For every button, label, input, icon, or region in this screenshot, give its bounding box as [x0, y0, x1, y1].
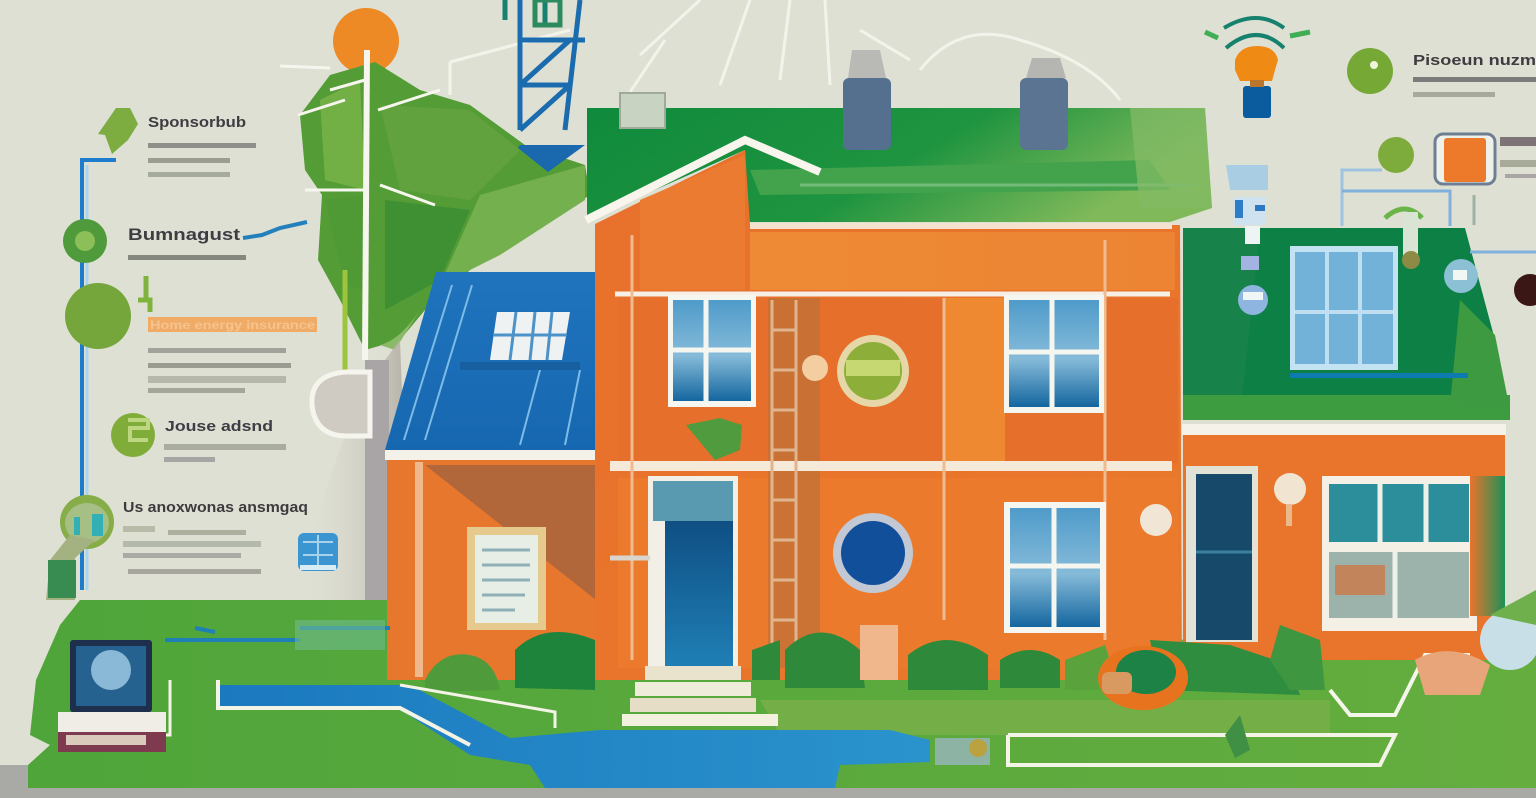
info block: item 5: [46, 495, 338, 600]
side door: [1186, 466, 1258, 642]
icon: sun: [333, 8, 399, 74]
steps: [622, 666, 778, 726]
window: upper right: [1004, 295, 1104, 413]
right connector frame: [1342, 170, 1536, 252]
main house wall: [586, 140, 1182, 680]
window: lower right: [1004, 502, 1106, 633]
large green tree: [280, 50, 590, 370]
sensor bulb: [1444, 259, 1478, 293]
large window: [1322, 476, 1505, 631]
icon: communication tower: [505, 0, 585, 172]
info block: item 2: Bumnagust: [128, 225, 240, 244]
info block: item 1: [98, 108, 256, 177]
right info block 2: [1378, 134, 1536, 184]
white gable trim: [586, 140, 820, 220]
info block: item 4: [111, 413, 286, 462]
info block: item 3: Home energy insurance: [150, 318, 315, 332]
plant sensor: [1385, 209, 1422, 269]
round blue window: [833, 513, 913, 593]
icon: rooftop solar panel: [460, 312, 580, 370]
icon: green badge: [1347, 48, 1393, 94]
grey puzzle connector: [312, 372, 370, 436]
leaf sprig: [686, 418, 742, 460]
icon: orange tablet: [1435, 134, 1495, 184]
icon: water droplet badge: [60, 495, 114, 549]
info block: item 1: Sponsorbub: [148, 114, 246, 131]
wifi bulb icon: [1205, 18, 1310, 118]
window: upper left: [668, 295, 756, 407]
right info block 1: [1347, 48, 1536, 97]
orange highlight bar: [148, 317, 317, 332]
bottom right garden sensors: [1330, 590, 1536, 715]
small plaque figure: [860, 625, 898, 680]
front door: [610, 476, 738, 666]
skylight box: [620, 93, 665, 128]
orange capsule device: [1098, 646, 1188, 710]
right info block 1: Pisoeun nuzm: [1413, 52, 1536, 69]
info block: item 3: [65, 276, 317, 393]
rooftop window: [1290, 246, 1398, 370]
icon: green dot: [1378, 137, 1414, 173]
icon: leaf badge: [98, 108, 138, 154]
right green roof: [1183, 228, 1510, 420]
shrubs: [425, 625, 1325, 695]
wifi column icons: [1226, 165, 1268, 315]
ladder: [772, 300, 796, 668]
bottom grey strip: [0, 788, 1536, 798]
info block: item 4: Jouse adsnd: [165, 418, 273, 435]
left annex wall: [385, 450, 597, 680]
info block: item 2: [63, 219, 246, 263]
icon: leaf circle: [65, 283, 131, 349]
green ground: [28, 600, 1536, 788]
icon: blue device: [298, 533, 338, 571]
dark round object: [1514, 274, 1536, 306]
blue roof: [385, 272, 595, 450]
laptop device: [58, 640, 166, 752]
right annex wall: [1182, 424, 1506, 660]
sky network lines: [450, 0, 1120, 100]
green upper roof: [587, 50, 1212, 222]
panel shadow beside left info column: [300, 340, 410, 600]
notice board: [467, 527, 546, 630]
info block: item 5: Us anoxwonas ansmgaq: [123, 499, 308, 516]
blue connector line left: [82, 160, 116, 590]
roof vents: [843, 50, 1068, 150]
wall lamps: [1140, 504, 1172, 536]
bottom water channel: [60, 620, 1395, 788]
round green gauge window: [802, 335, 909, 407]
icon: green badge: [111, 413, 155, 457]
icon: green badge: [63, 219, 107, 263]
wall lamp: [1274, 473, 1306, 526]
